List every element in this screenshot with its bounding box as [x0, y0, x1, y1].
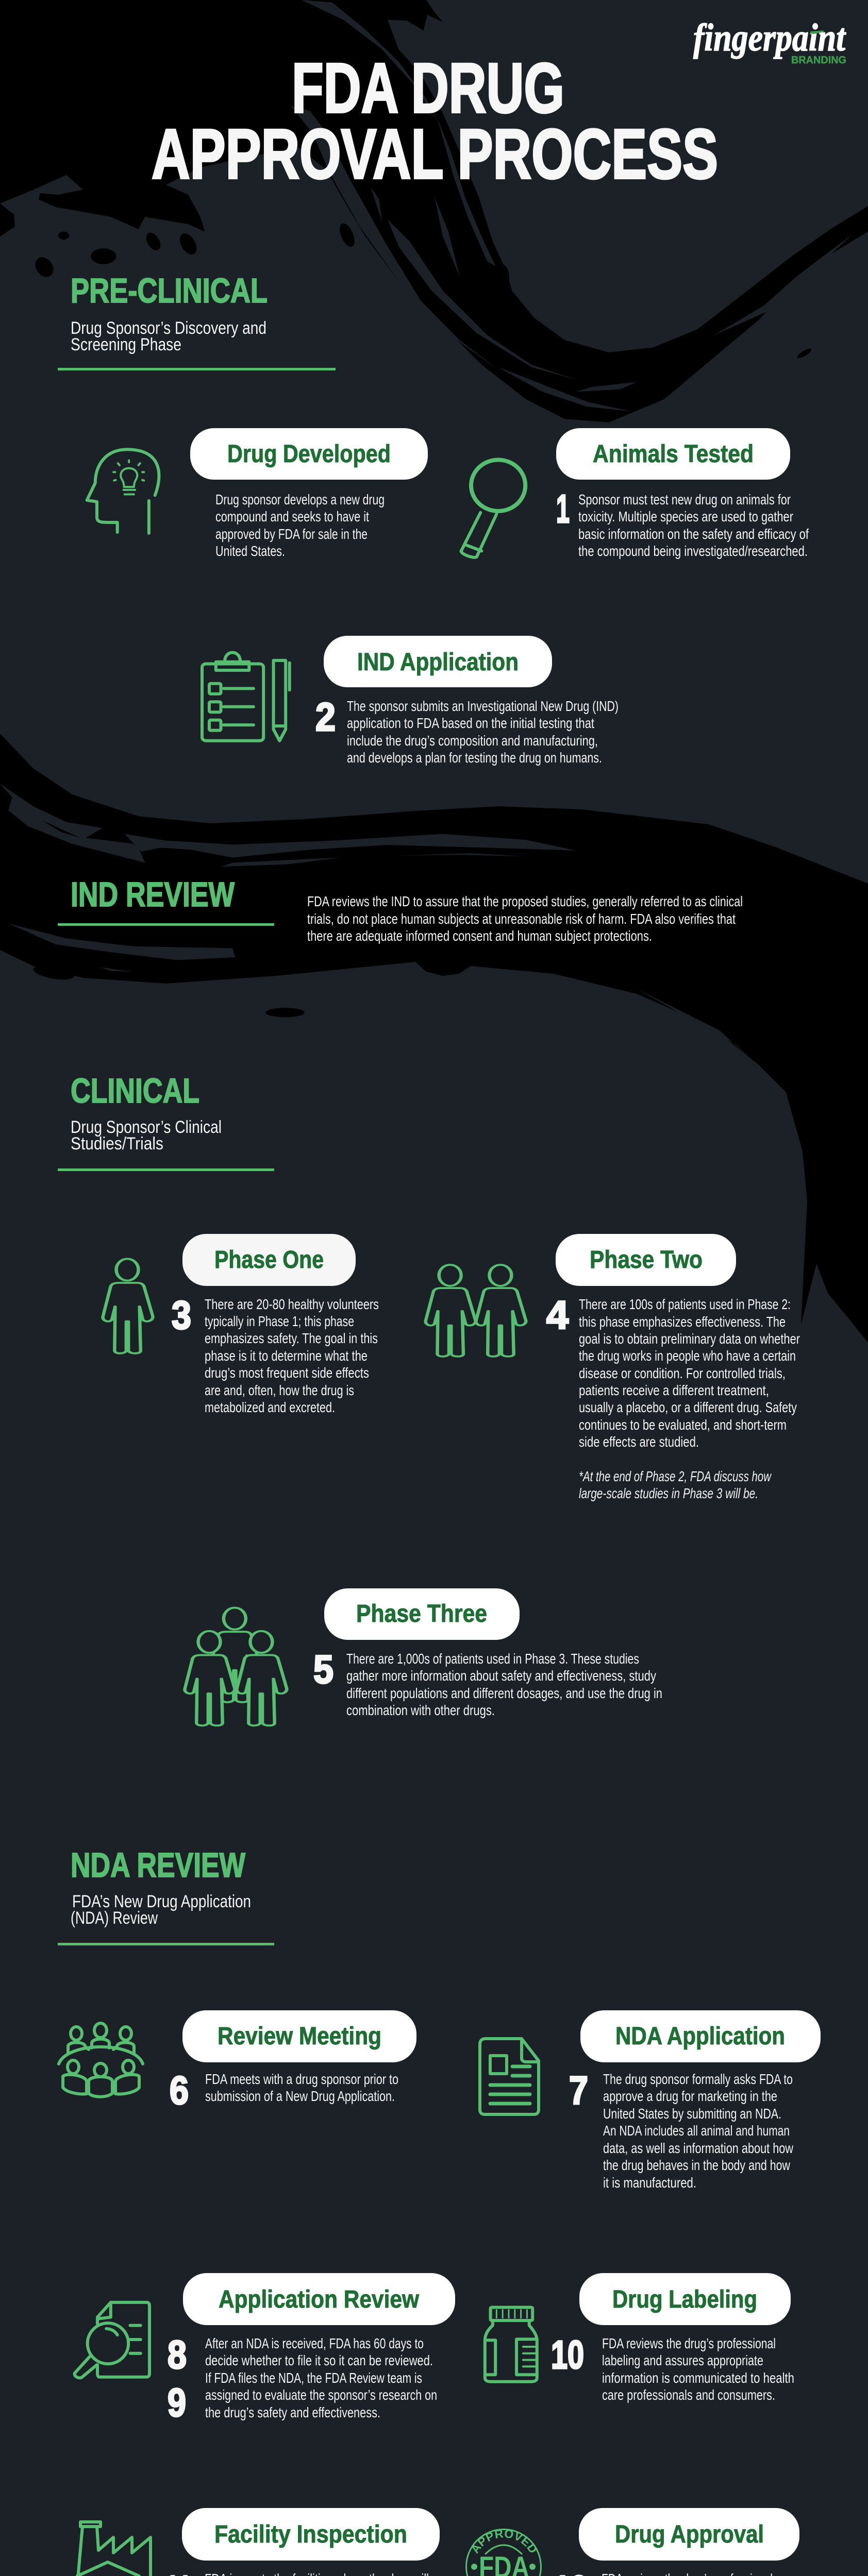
body text [603, 2071, 794, 2191]
panel: drug labeling [485, 2273, 794, 2403]
pill heading: Facility Inspection [214, 2521, 407, 2548]
step number 3: 3 [172, 1293, 191, 1337]
panel: IND review: there are adequate informed consent and human subject protections. [307, 928, 652, 944]
pill heading [182, 2508, 440, 2561]
icon: meeting around table [59, 2023, 143, 2097]
icon: two people [426, 1265, 526, 1357]
step number 2: 2 [315, 695, 336, 739]
background: IND band and right edge stroke [0, 734, 868, 1343]
step numbers 8 and 9: 9 [168, 2381, 186, 2425]
icon: three people [185, 1608, 287, 1725]
panel: IND review: trials, do not place human subjects at unreasonable risk of harm. FDA also verifies that [307, 911, 736, 927]
icon: document [480, 2039, 539, 2114]
panel: pre-clinical heading [58, 272, 336, 370]
body text: If FDA files the NDA, the FDA Review team is [205, 2370, 422, 2386]
body text [579, 1296, 800, 1501]
pill heading [182, 2010, 416, 2062]
logo: fingerpaint branding top: fingerpaint [693, 16, 846, 59]
icon: magnifying glass [461, 460, 525, 557]
body text: different populations and different dosages, and use the drug in [346, 1685, 662, 1701]
logo: fingerpaint branding top: BRANDING [791, 55, 846, 66]
step number 4: 4 [546, 1293, 569, 1337]
body text: information is communicated to health [602, 2370, 794, 2386]
panel: drug developed [87, 428, 428, 559]
body text [205, 1296, 379, 1415]
step numbers 8 and 9: 8 [168, 2333, 187, 2377]
body text: continues to be evaluated, and short-term [579, 1417, 787, 1433]
step number 7: 7 [569, 2069, 588, 2113]
body text: FDA meets with a drug sponsor prior to [205, 2071, 398, 2087]
panel: NDA review heading: (NDA) Review [71, 1908, 158, 1928]
body text: include the drug’s composition and manufacturing, [347, 733, 598, 749]
pill heading [324, 636, 552, 687]
body text: patients receive a different treatment, [579, 1382, 769, 1398]
panel: IND application [202, 636, 619, 766]
body text: decide whether to file it so it can be reviewed. [205, 2352, 433, 2368]
body text: typically in Phase 1; this phase [205, 1313, 354, 1329]
body text: United States. [215, 543, 285, 559]
panel: animals tested [461, 428, 809, 559]
step number 1: 1 [556, 487, 570, 531]
icon: one person [103, 1259, 153, 1353]
pill heading: Review Meeting [218, 2023, 381, 2050]
body text: There are 20-80 healthy volunteers [205, 1296, 379, 1312]
panel: pre-clinical heading: Screening Phase [71, 335, 181, 354]
body text: this phase emphasizes effectiveness. The [579, 1314, 786, 1330]
pill heading [190, 428, 428, 480]
icon: FDA approved stamp [465, 2529, 542, 2576]
body text: compound and seeks to have it [215, 509, 369, 524]
body text: toxicity. Multiple species are used to gather [578, 509, 793, 524]
body text: disease or condition. For controlled trials, [579, 1365, 786, 1381]
background: top brush stroke [0, 0, 868, 422]
step number 10: 10 [551, 2333, 584, 2377]
body text: FDA reviews the drug’s professional [602, 2335, 776, 2351]
panel: application review [75, 2273, 455, 2425]
body text [215, 492, 385, 559]
body text: data, as well as information about how [603, 2140, 794, 2156]
pill heading: Drug Developed [227, 440, 391, 468]
body text: drug’s most frequent side effects [205, 1365, 369, 1381]
panel: drug approval [465, 2508, 799, 2576]
pill heading: Application Review [219, 2286, 420, 2313]
panel: pre-clinical heading: Drug Sponsor’s Discovery and [71, 318, 266, 338]
pill heading [580, 2010, 821, 2062]
panel: clinical heading [58, 1072, 274, 1171]
panel: NDA review heading: NDA REVIEW [71, 1846, 246, 1885]
body text: the drug’s safety and effectiveness. [205, 2404, 380, 2420]
body text: There are 1,000s of patients used in Phase 3. These studies [346, 1651, 639, 1667]
pill heading: IND Application [357, 649, 519, 676]
pill heading [579, 2273, 791, 2325]
body text: approved by FDA for sale in the [215, 526, 368, 542]
body text: the compound being investigated/researched. [578, 543, 808, 559]
panel: pre-clinical heading: PRE-CLINICAL [71, 272, 268, 310]
panel: IND review: FDA reviews the IND to assure that the proposed studies, generally referred to as clinical [307, 893, 743, 909]
body text: There are 100s of patients used in Phase 2: [579, 1296, 791, 1312]
pill heading: NDA Application [615, 2023, 785, 2050]
body text: are and, often, how the drug is [205, 1382, 354, 1398]
panel: NDA application [480, 2010, 821, 2191]
body text [205, 2335, 437, 2420]
body text: Sponsor must test new drug on animals for [578, 492, 791, 507]
body text [347, 698, 619, 766]
panel: review meeting [59, 2010, 416, 2113]
step numbers 8 and 9 [168, 2333, 187, 2425]
pill heading [579, 2508, 799, 2561]
body text: phase is it to determine what the [205, 1348, 368, 1364]
pill heading: Animals Tested [593, 440, 754, 468]
body text: approve a drug for marketing in the [603, 2088, 777, 2104]
icon: factory [76, 2522, 151, 2576]
body text: gather more information about safety and effectiveness, study [346, 1668, 656, 1684]
body text: usually a placebo, or a different drug. Safety [579, 1399, 797, 1415]
body text: *At the end of Phase 2, FDA discuss how [579, 1468, 772, 1484]
panel: clinical heading: Drug Sponsor’s Clinical [71, 1117, 222, 1137]
panel: NDA review heading [58, 1846, 274, 1945]
body text [205, 2071, 398, 2104]
pill heading [182, 1234, 356, 1286]
title: FDA DRUG [292, 49, 564, 128]
icon: head with light bulb [87, 449, 159, 533]
body text: side effects are studied. [579, 1434, 699, 1450]
icon: document with magnifier [75, 2302, 149, 2378]
panel: phase three [185, 1588, 662, 1725]
body text: application to FDA based on the initial testing that [347, 715, 594, 731]
title [152, 49, 718, 194]
pill heading: Drug Labeling [612, 2286, 757, 2313]
icon: medicine bottle [485, 2307, 537, 2382]
body text: and develops a plan for testing the drug on humans. [347, 750, 602, 766]
body text: emphasizes safety. The goal in this [205, 1330, 378, 1346]
pill heading [556, 428, 790, 480]
step number 6: 6 [170, 2069, 189, 2113]
pill heading [183, 2273, 455, 2325]
step number 5: 5 [313, 1648, 333, 1692]
body text: metabolized and excreted. [205, 1399, 335, 1415]
panel: clinical heading: Studies/Trials [71, 1134, 163, 1154]
pill heading: Phase Two [590, 1246, 703, 1274]
body text: labeling and assures appropriate [602, 2352, 763, 2368]
body text: assigned to evaluate the sponsor’s research on [205, 2387, 437, 2403]
panel: clinical heading: CLINICAL [71, 1072, 199, 1110]
body text: United States by submitting an NDA. [603, 2106, 781, 2122]
pill heading: Phase One [214, 1246, 324, 1274]
pill heading [556, 1234, 736, 1286]
pill heading: Drug Approval [615, 2521, 764, 2548]
panel: phase two [426, 1234, 800, 1501]
body text: The drug sponsor formally asks FDA to [603, 2071, 793, 2087]
body text: Drug sponsor develops a new drug [215, 492, 385, 507]
body text: care professionals and consumers. [602, 2387, 775, 2403]
icon: FDA approved stamp: APPROVED [472, 2530, 536, 2554]
body text: An NDA includes all animal and human [603, 2123, 790, 2139]
body text [346, 1651, 662, 1718]
panel: IND review [58, 875, 743, 944]
panel: NDA review heading: FDA’s New Drug Application [72, 1892, 251, 1911]
pill heading [324, 1588, 520, 1640]
panel: IND review: IND REVIEW [71, 875, 235, 914]
body text [602, 2335, 794, 2403]
body text: After an NDA is received, FDA has 60 days to [205, 2335, 424, 2351]
body text: the drug behaves in the body and how [603, 2157, 791, 2173]
body text: submission of a New Drug Application. [205, 2088, 395, 2104]
body text: basic information on the safety and efficacy of [578, 526, 809, 542]
body text: large-scale studies in Phase 3 will be. [579, 1485, 758, 1501]
body text: the drug works in people who have a certain [579, 1348, 796, 1364]
icon: clipboard and pencil [202, 653, 290, 741]
panel: phase one [103, 1234, 379, 1415]
panel: facility inspection [76, 2508, 440, 2576]
body text: combination with other drugs. [346, 1702, 495, 1718]
body text: it is manufactured. [603, 2175, 696, 2191]
pill heading: Phase Three [356, 1600, 487, 1628]
body text: goal is to obtain preliminary data on whether [579, 1331, 800, 1347]
body text: The sponsor submits an Investigational New Drug (IND) [347, 698, 619, 714]
body text [578, 492, 809, 559]
